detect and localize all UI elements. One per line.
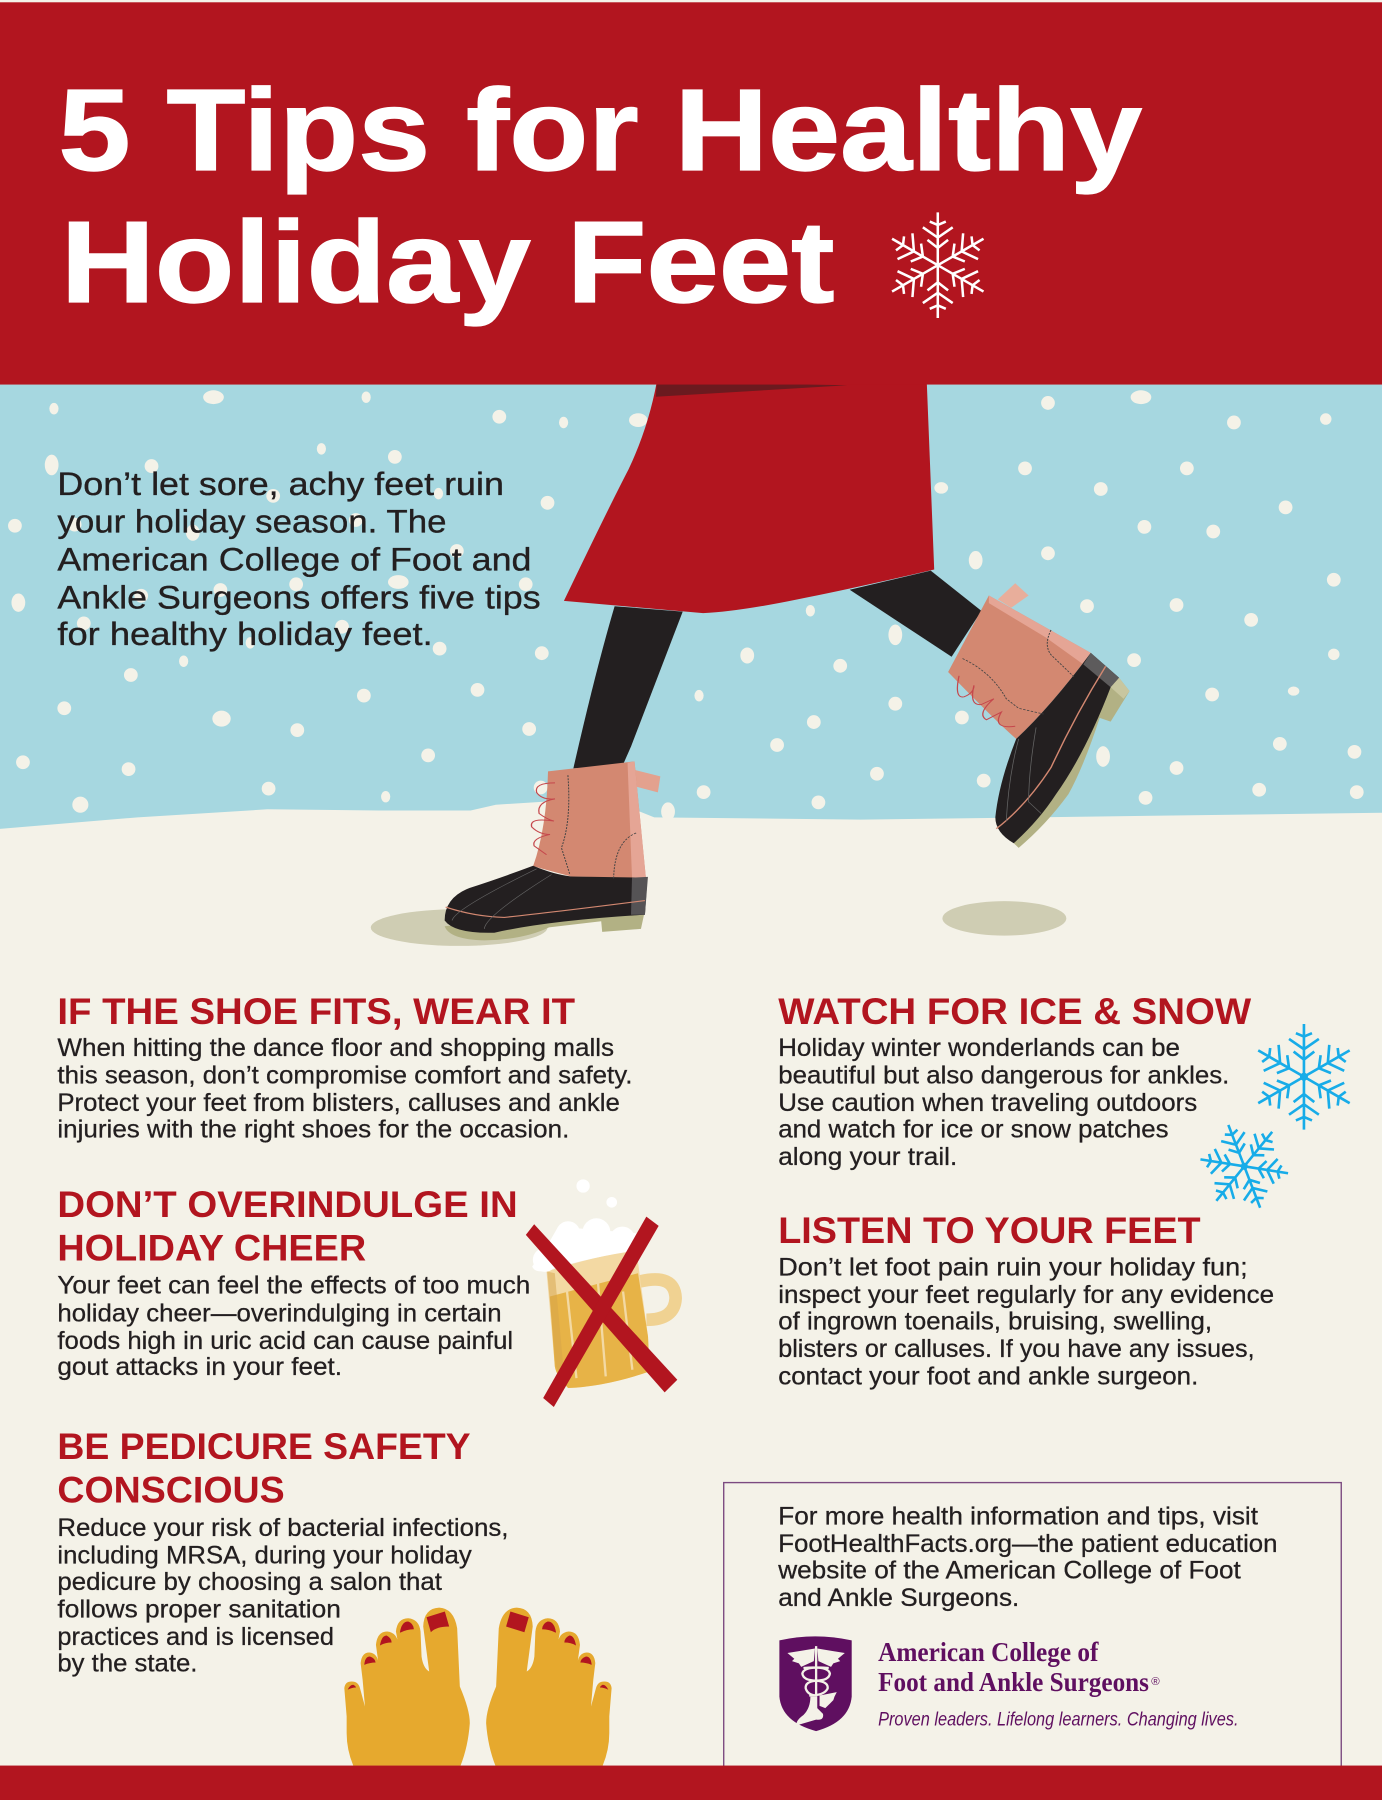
- body text: and watch for ice or snow patches: [778, 1116, 1169, 1144]
- winged foot: [796, 1692, 837, 1725]
- red skirt: [564, 381, 934, 613]
- heading: IF THE SHOE FITS, WEAR IT: [57, 991, 576, 1032]
- logo wordmark: ®: [1151, 1676, 1160, 1688]
- heading: [57, 1184, 518, 1268]
- ground shadow: raised boot: [942, 901, 1066, 936]
- logo tagline: Proven leaders. Lifelong learners. Changing lives.: [878, 1708, 1239, 1730]
- body text: [778, 1034, 1229, 1171]
- panel: more information box: [724, 1483, 1341, 1770]
- heading: HOLIDAY CHEER: [57, 1227, 366, 1268]
- body text: follows proper sanitation: [57, 1595, 341, 1623]
- box text: For more health information and tips, visit: [778, 1502, 1258, 1530]
- title: 5 Tips for Healthy: [59, 65, 1142, 195]
- icon: blue snowflakes: [1187, 1024, 1357, 1224]
- body text: [57, 1514, 508, 1677]
- heading: DON’T OVERINDULGE IN: [57, 1184, 518, 1225]
- box text: website of the American College of Foot: [777, 1556, 1241, 1584]
- title: Holiday Feet: [61, 197, 834, 327]
- tip: don't overindulge: [57, 1184, 530, 1381]
- icon: white snowflake: [885, 212, 991, 318]
- intro text: your holiday season. The: [57, 504, 447, 540]
- left foot: [344, 1608, 470, 1766]
- caduceus staff and snakes: [802, 1646, 830, 1697]
- body text: contact your foot and ankle surgeon.: [778, 1362, 1198, 1390]
- body text: gout attacks in your feet.: [57, 1353, 342, 1381]
- box text: [777, 1502, 1278, 1612]
- body text: [57, 1034, 632, 1144]
- body text: along your trail.: [778, 1143, 957, 1171]
- body text: pedicure by choosing a salon that: [57, 1568, 442, 1596]
- right foot: [486, 1608, 612, 1766]
- title: [59, 65, 1142, 327]
- logo wordmark: [878, 1636, 1160, 1697]
- body text: Reduce your risk of bacterial infections,: [57, 1514, 508, 1542]
- body text: this season, don’t compromise comfort and safety.: [57, 1062, 632, 1090]
- intro text: for healthy holiday feet.: [57, 616, 433, 652]
- body text: by the state.: [57, 1649, 197, 1677]
- snowfall: [8, 390, 1364, 821]
- box text: FootHealthFacts.org—the patient education: [778, 1530, 1278, 1558]
- heading: [57, 1426, 471, 1511]
- tip: if the shoe fits: [57, 991, 632, 1144]
- body text: injuries with the right shoes for the occasion.: [57, 1116, 569, 1144]
- icon: crossed-out beer mug: [526, 1179, 677, 1407]
- intro text: Don’t let sore, achy feet ruin: [57, 466, 504, 502]
- ground shadow: planted boot: [371, 909, 548, 946]
- body text: Your feet can feel the effects of too much: [57, 1272, 530, 1300]
- intro text: [57, 466, 541, 652]
- heading: CONSCIOUS: [57, 1470, 285, 1511]
- body text: of ingrown toenails, bruising, swelling,: [778, 1307, 1212, 1335]
- red header band: [0, 2, 1382, 385]
- caduceus wings: [787, 1648, 845, 1667]
- body text: including MRSA, during your holiday: [57, 1542, 472, 1570]
- body text: practices and is licensed: [57, 1623, 334, 1651]
- body text: blisters or calluses. If you have any issues,: [778, 1335, 1255, 1363]
- illustration: walking legs in skirt and boots: [445, 381, 1130, 940]
- planted boot: [445, 761, 660, 940]
- body text: inspect your feet regularly for any evidence: [778, 1281, 1274, 1309]
- red footer band: [0, 1766, 1382, 1800]
- heading: LISTEN TO YOUR FEET: [778, 1210, 1201, 1251]
- snowy ground: [0, 801, 1382, 1800]
- tip: pedicure safety: [57, 1426, 508, 1677]
- logo shield: [779, 1636, 852, 1731]
- body text: Protect your feet from blisters, calluses and ankle: [57, 1089, 620, 1117]
- heading: WATCH FOR ICE & SNOW: [778, 991, 1252, 1032]
- skirt shadow: [656, 381, 847, 397]
- tip: watch for ice and snow: [778, 991, 1252, 1171]
- icon: feet with painted toenails: [344, 1608, 612, 1766]
- body text: foods high in uric acid can cause painful: [57, 1327, 513, 1355]
- body text: holiday cheer—overindulging in certain: [57, 1299, 502, 1327]
- raised boot: [948, 583, 1130, 848]
- tip: listen to your feet: [778, 1210, 1274, 1390]
- body text: [57, 1272, 530, 1381]
- intro text: American College of Foot and: [57, 542, 531, 578]
- raised leg: [850, 571, 981, 657]
- body text: Don’t let foot pain ruin your holiday fun;: [778, 1253, 1248, 1281]
- body text: When hitting the dance floor and shopping malls: [57, 1034, 614, 1062]
- logo wordmark: Foot and Ankle Surgeons: [878, 1666, 1149, 1697]
- heading: BE PEDICURE SAFETY: [57, 1426, 471, 1467]
- standing leg: [573, 606, 683, 768]
- sky background: [0, 385, 1382, 838]
- logo wordmark: American College of: [878, 1636, 1099, 1667]
- box text: and Ankle Surgeons.: [778, 1584, 1019, 1612]
- body text: beautiful but also dangerous for ankles.: [778, 1062, 1229, 1090]
- body text: Holiday winter wonderlands can be: [778, 1034, 1180, 1062]
- intro text: Ankle Surgeons offers five tips: [57, 579, 541, 615]
- body text: [778, 1253, 1274, 1390]
- body text: Use caution when traveling outdoors: [778, 1089, 1197, 1117]
